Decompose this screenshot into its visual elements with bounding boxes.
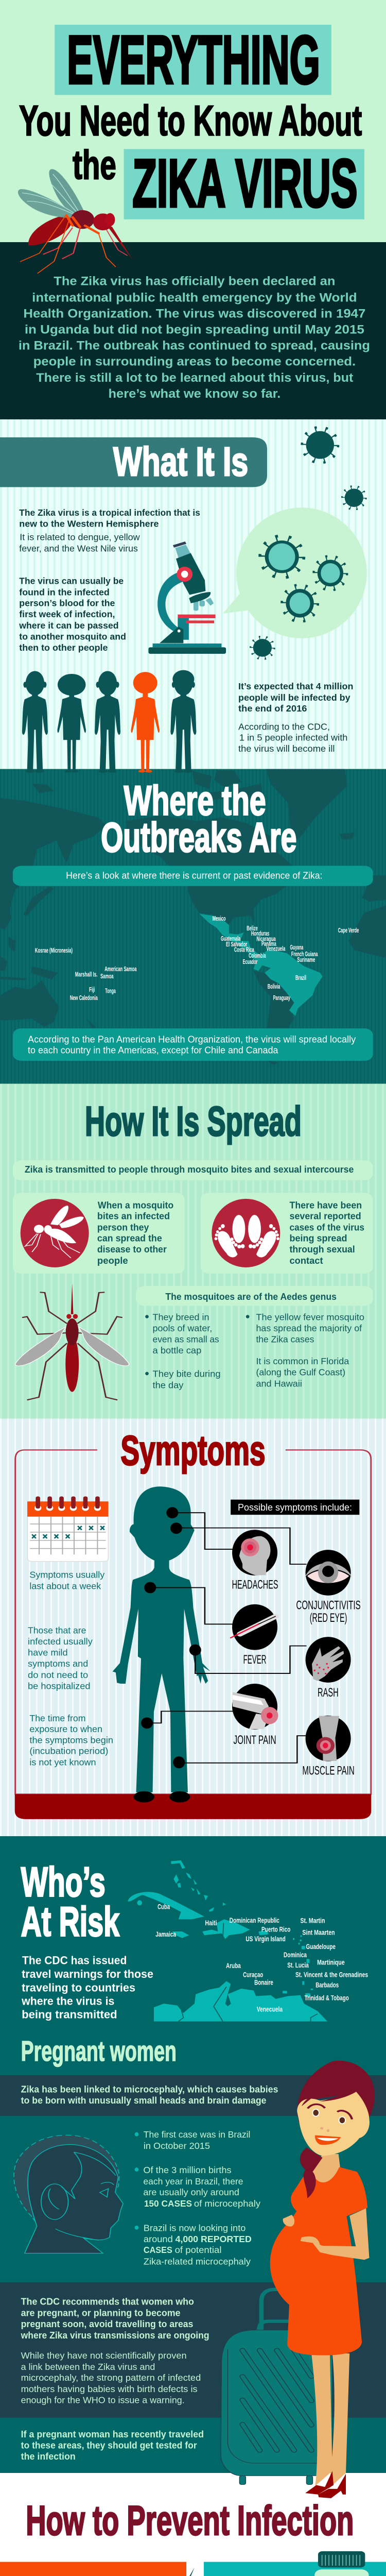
- map labels: Caribbean: Haiti: [205, 1919, 217, 1927]
- panel: Aedes genus facts: a bottle cap: [153, 1346, 201, 1355]
- text: what the virus is: new to the Western Hemisphere: [19, 519, 159, 529]
- symptom: headaches: [232, 1530, 278, 1591]
- callout: map intro: [13, 866, 373, 886]
- text: how it passes on: then to other people: [19, 642, 108, 653]
- symptom: rash: RASH: [318, 1685, 339, 1699]
- panel: Aedes genus facts: They bite during: [153, 1369, 221, 1379]
- map labels: Colombia: [249, 953, 266, 959]
- icon: microscope: [148, 541, 226, 654]
- list: Brazil facts: 150 CASES: [144, 2199, 192, 2209]
- heading banner: What It Is: [0, 437, 267, 487]
- symptom: joint pain: JOINT PAIN: [233, 1733, 276, 1747]
- map labels: Caribbean: Puerto Rico: [261, 1925, 291, 1934]
- panel backgrounds: [0, 2562, 386, 2576]
- map labels: Costa Rica: [234, 946, 254, 954]
- text: link not proven: enough for the WHO to issue a warning.: [21, 2395, 185, 2405]
- text: how it passes on: [19, 587, 126, 653]
- panel: mosquito bites: disease to other: [97, 1244, 167, 1255]
- panel: sexual contact: There have been: [290, 1200, 362, 1211]
- section: who's at risk: [0, 1836, 386, 2498]
- symptom: rash: [306, 1637, 351, 1699]
- icon: row of people, one highlighted: [22, 670, 196, 773]
- panel: Aedes genus facts: even as small as: [153, 1334, 219, 1345]
- section: introduction: [0, 242, 386, 419]
- text: duration and severity: (incubation period): [29, 1746, 108, 1756]
- list: Brazil facts: Zika-related microcephaly: [144, 2257, 251, 2267]
- heading: Who's At Risk: At Risk: [21, 1899, 119, 1945]
- symptom: joint pain: [232, 1684, 278, 1747]
- map labels: Caribbean: Martinique: [317, 1959, 345, 1967]
- text: get tested: [21, 2429, 204, 2462]
- heading: Where the Outbreaks Are: [101, 777, 296, 861]
- text: CDC recommendation: pregnant soon, avoid travelling to areas: [21, 2319, 193, 2329]
- text: duration and severity: be hospitalized: [28, 1681, 91, 1691]
- text: infection statistics: It’s expected that 4 million: [238, 682, 353, 691]
- map labels: Panama: [261, 941, 276, 948]
- text: CDC recommendation: where Zika virus transmissions are ongoing: [21, 2330, 209, 2341]
- map labels: Mexico: [213, 916, 226, 922]
- title: [19, 22, 364, 221]
- symptom: fever: FEVER: [243, 1652, 267, 1666]
- illustration: pregnant woman: [270, 2061, 375, 2498]
- text: travel warnings: travel warnings for those: [22, 1967, 153, 1980]
- map labels: Kosrae (Micronesia): [35, 947, 73, 955]
- map labels: Caribbean: Curaçao: [243, 1971, 263, 1979]
- panel: sexual contact: being spread: [290, 1233, 347, 1244]
- map labels: [35, 916, 359, 1002]
- panel: sexual contact: several reported: [290, 1211, 361, 1222]
- panel: mosquito bites: person they: [97, 1222, 149, 1233]
- callout: transmission: [13, 1160, 373, 1180]
- panel: Aedes genus facts: the day: [153, 1380, 184, 1391]
- map labels: Samoa: [100, 973, 114, 980]
- map labels: Fiji: [89, 987, 95, 994]
- icon: feet: [215, 1215, 279, 1257]
- text: link not proven: a link between the Zika virus and: [21, 2362, 155, 2372]
- text: how it passes on: first week of infection,: [19, 609, 115, 619]
- map labels: Guyana: [290, 944, 304, 951]
- map labels: Honduras: [251, 930, 269, 938]
- text: CDC recommendation: are pregnant, or planning to become: [21, 2308, 181, 2318]
- text: infection statistics: [238, 682, 353, 754]
- label: possible symptoms: Possible symptoms include:: [238, 1502, 352, 1513]
- text: duration and severity: last about a week: [29, 1581, 101, 1591]
- section: symptoms: HEADACHES: [232, 1578, 278, 1591]
- text: duration and severity: Those that are: [28, 1625, 86, 1636]
- frame: [15, 1450, 371, 1794]
- map labels: Paraguay: [273, 995, 290, 1002]
- text: microcephaly link: to be born with unusually small heads and brain damage: [21, 2095, 267, 2106]
- panel: sexual contact: contact: [290, 1256, 323, 1266]
- title: the: [73, 142, 116, 188]
- map labels: Caribbean: Cuba: [157, 1903, 170, 1911]
- panel: Aedes genus facts: [136, 1286, 373, 1391]
- section: symptoms: [0, 1419, 386, 1836]
- map labels: Caribbean: Sint Maarten: [302, 1929, 335, 1937]
- map labels: Caribbean: Jamaica: [155, 1930, 177, 1938]
- icon: suitcase: [221, 2290, 332, 2484]
- text: travel warnings: where the virus is: [21, 1994, 114, 2008]
- list: Brazil facts: of potential: [175, 2245, 221, 2255]
- text: duration and severity: symptoms and: [28, 1659, 88, 1669]
- map labels: Caribbean: US Virgin Island: [245, 1935, 286, 1943]
- text: what the virus is: fever, and the West Nile virus: [19, 544, 138, 554]
- text: travel warnings: being transmitted: [22, 2008, 117, 2021]
- text: duration and severity: Symptoms usually: [29, 1570, 105, 1580]
- text: duration and severity: the symptoms begin: [29, 1735, 113, 1745]
- map labels: Caribbean: St. Lucia: [287, 1961, 309, 1970]
- text: what the virus is: [19, 507, 200, 586]
- map labels: El Salvador: [226, 941, 247, 948]
- list: Brazil facts: Of the 3 million births: [143, 2165, 232, 2175]
- map labels: Brazil: [295, 975, 306, 981]
- map labels: Tonga: [105, 988, 116, 995]
- map labels: Caribbean: Barbados: [315, 1981, 339, 1989]
- icon: speech bubble with viruses: [223, 507, 367, 638]
- list: Brazil facts: in October 2015: [144, 2141, 210, 2151]
- list: Brazil facts: 4,000 REPORTED: [176, 2234, 252, 2244]
- section: what it is: [0, 419, 386, 769]
- text: infection statistics: the virus will become ill: [238, 744, 335, 754]
- text: infection statistics: According to the CDC,: [238, 722, 330, 732]
- text: travel warnings: [21, 1954, 153, 2021]
- text: duration and severity: infected usually: [28, 1637, 93, 1647]
- text: infection statistics: the end of 2016: [238, 704, 307, 714]
- text: travel warnings: traveling to countries: [22, 1981, 135, 1994]
- heading: Where the Outbreaks Are: Where the: [124, 777, 266, 824]
- text: link not proven: [21, 2351, 201, 2405]
- text: what the virus is: The virus can usually be: [19, 576, 124, 586]
- map labels: New Caledonia: [70, 995, 98, 1002]
- list: Brazil facts: [135, 2130, 261, 2267]
- panel: sexual contact: [201, 1193, 373, 1274]
- text: what the virus is: It is related to dengue, yellow: [20, 532, 141, 543]
- icon: floating viruses: [251, 427, 366, 659]
- list: Brazil facts: each year in Brazil, there: [143, 2177, 243, 2187]
- map labels: Nicaragua: [256, 936, 276, 943]
- text: how it passes on: found in the infected: [19, 587, 110, 598]
- text: how it passes on: where it can be passed: [19, 621, 119, 631]
- section: how it is spread: [0, 1084, 386, 1419]
- world map: [0, 769, 386, 1065]
- list: Brazil facts: Brazil is now looking into: [144, 2223, 245, 2233]
- text: duration and severity: The time from: [29, 1713, 85, 1723]
- map labels: American Samoa: [104, 966, 137, 973]
- text: link not proven: While they have not scientifically proven: [21, 2351, 187, 2361]
- map labels: Bolivia: [268, 984, 280, 990]
- map labels: Caribbean: Aruba: [226, 1962, 241, 1970]
- map labels: Suriname: [297, 957, 315, 963]
- section: where the outbreaks are: Cape Verde: [338, 927, 359, 934]
- text: microcephaly link: [21, 2084, 278, 2106]
- section: where the outbreaks are: [0, 769, 386, 1084]
- section: how to prevent infection: [0, 2498, 386, 2576]
- text: link not proven: mothers having babies with birth defects is: [21, 2384, 198, 2394]
- icon: mosquito top view: [15, 1283, 129, 1400]
- human figure with connector lines: [113, 1486, 307, 1803]
- list: Brazil facts: around: [144, 2234, 173, 2244]
- panel: mosquito bites: When a mosquito: [98, 1200, 173, 1211]
- text: CDC recommendation: The CDC recommends that women who: [21, 2296, 194, 2307]
- symptom: muscle pain: [302, 1716, 355, 1777]
- map labels: Caribbean: Bonaire: [254, 1979, 273, 1987]
- list: Brazil facts: The first case was in Brazil: [144, 2130, 250, 2140]
- icon: white mosquito: [25, 1206, 84, 1258]
- map labels: Caribbean: Guadeloupe: [306, 1943, 336, 1951]
- map labels: Venezuela: [267, 945, 286, 953]
- text: microcephaly link: Zika has been linked to microcephaly, which causes babies: [21, 2084, 278, 2095]
- text: infection statistics: 1 in 5 people infected with: [239, 733, 347, 743]
- map: Caribbean: [128, 1860, 327, 2021]
- icon: calendar: [27, 1497, 108, 1562]
- text: link not proven: microcephaly, the strong pattern of infected: [21, 2373, 201, 2383]
- panel: mosquito bites: can spread the: [97, 1233, 162, 1244]
- text: duration and severity: [28, 1570, 113, 1768]
- symptom: fever: [231, 1604, 277, 1666]
- heading: Pregnant women: Pregnant women: [21, 2036, 177, 2067]
- panel: mosquito bites: [13, 1193, 185, 1274]
- icon: medicine bottle: [314, 2551, 369, 2576]
- intro text: here’s what we know so far.: [108, 387, 280, 400]
- map labels: Caribbean: St. Martin: [301, 1917, 325, 1925]
- callout: spread prediction: to each country in the Americas, except for Chile and Canada: [28, 1045, 278, 1056]
- map labels: Caribbean: Trinidad & Tobago: [305, 1994, 349, 2002]
- icon: baby head profile: [14, 2135, 123, 2253]
- map labels: Caribbean: Dominica: [284, 1951, 307, 1959]
- map labels: Caribbean: Venecuela: [257, 2006, 283, 2013]
- map labels: Ecuador: [243, 959, 257, 965]
- text: how it passes on: person’s blood for the: [19, 598, 115, 608]
- panel: Aedes genus facts: (along the Gulf Coast): [256, 1367, 345, 1378]
- panel: Aedes genus facts: pools of water,: [153, 1323, 212, 1333]
- list: Brazil facts: of microcephaly: [194, 2199, 261, 2209]
- list: Brazil facts: are usually only around: [143, 2188, 239, 2197]
- text: duration and severity: is not yet known: [29, 1757, 96, 1768]
- panel: Aedes genus facts: the Zika cases: [256, 1334, 314, 1345]
- heading banner: What It Is: What It Is: [113, 438, 248, 484]
- text: how it passes on: to another mosquito and: [19, 632, 126, 642]
- map labels: Caribbean: Dominican Republic: [230, 1917, 279, 1924]
- text: travel warnings: The CDC has issued: [22, 1954, 127, 1967]
- symptom: conjunctivitis: [296, 1550, 361, 1624]
- panel: sexual contact: through sexual: [290, 1244, 355, 1255]
- icon: syringe: [117, 2568, 195, 2576]
- text: duration and severity: exposure to when: [29, 1724, 102, 1734]
- text: what the virus is: The Zika virus is a tropical infection that is: [19, 507, 200, 518]
- map labels: Belize: [247, 925, 258, 932]
- text: get tested: the infection: [21, 2451, 76, 2462]
- callout: spread prediction: [13, 1028, 373, 1061]
- panel: mosquito bites: people: [97, 1256, 128, 1266]
- map labels: French Guiana: [291, 951, 318, 958]
- map labels: Marshall Is.: [75, 971, 97, 978]
- text: duration and severity: have mild: [28, 1648, 68, 1658]
- section: title: [0, 0, 386, 242]
- text: CDC recommendation: [21, 2296, 209, 2341]
- text: get tested: If a pregnant woman has recently traveled: [21, 2429, 204, 2439]
- panel: Aedes genus facts: It is common in Florida: [256, 1357, 349, 1367]
- map labels: Guatemala: [221, 936, 241, 942]
- text: infection statistics: people will be infected by: [238, 693, 350, 703]
- panel: Aedes genus facts: They breed in: [153, 1312, 209, 1323]
- panel: Aedes genus facts: and Hawaii: [256, 1379, 302, 1389]
- map labels: Caribbean: [155, 1903, 368, 2013]
- icon: red mosquito: [18, 169, 133, 274]
- heading: Who's At Risk: Who’s: [21, 1859, 106, 1905]
- panel: mosquito bites: bites an infected: [97, 1211, 170, 1222]
- heading: Who's At Risk: [21, 1859, 119, 1945]
- list: Brazil facts: CASES: [144, 2245, 172, 2255]
- text: duration and severity: do not need to: [28, 1670, 88, 1680]
- text: get tested: to these areas, they should get tested for: [21, 2440, 197, 2451]
- red floor band: [15, 1794, 371, 1819]
- intro text: [19, 274, 370, 400]
- label: possible symptoms: [231, 1500, 359, 1515]
- panel: no medicine: [217, 2551, 369, 2576]
